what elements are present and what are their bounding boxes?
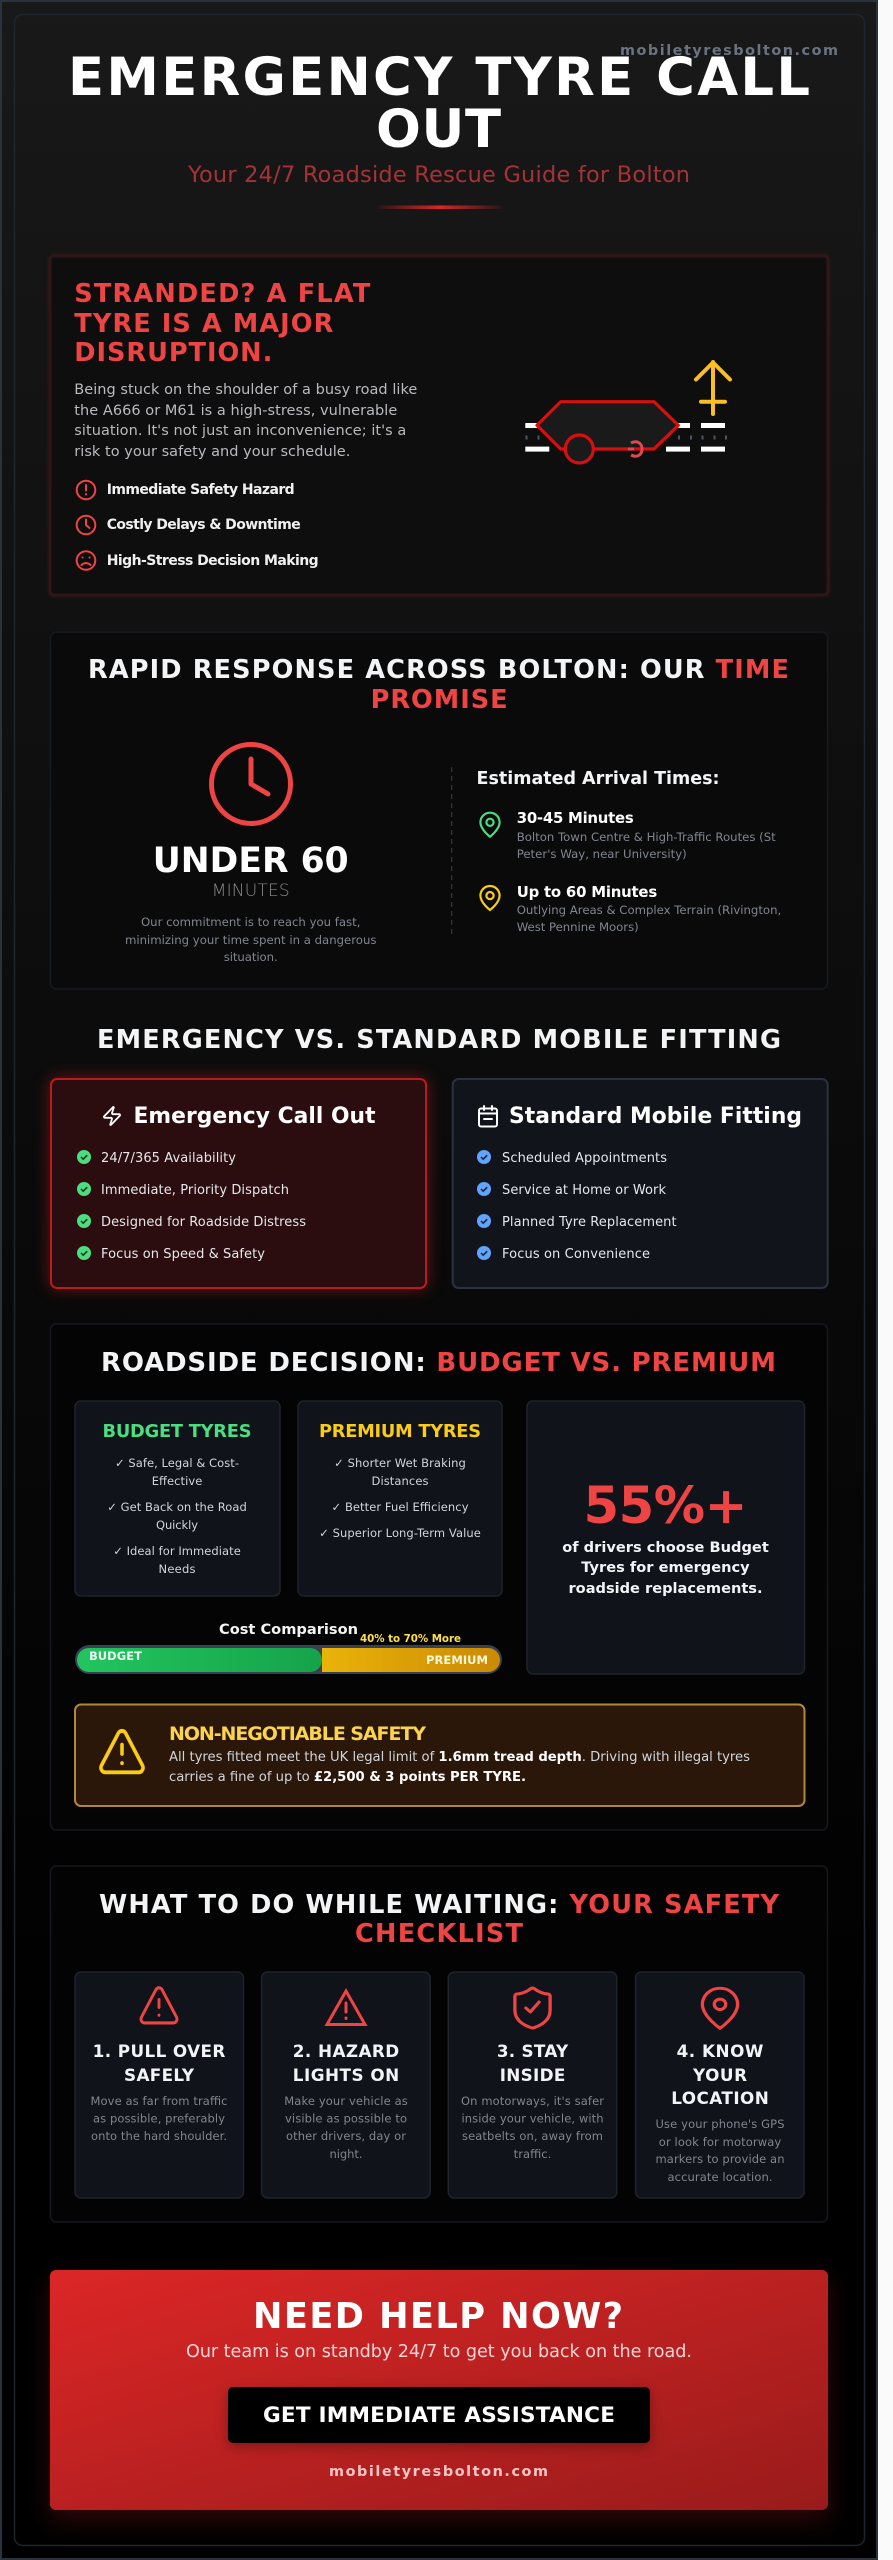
hero body text: the A666 or M61 is a high-stress, vulnerable <box>74 403 397 419</box>
hero heading: DISRUPTION. <box>74 338 272 368</box>
hero heading: STRANDED? A FLAT <box>74 279 371 309</box>
step 4: know your location: markers to provide an <box>656 2152 784 2166</box>
section heading: emergency vs standard: EMERGENCY VS. STANDARD MOBILE FITTING <box>97 1025 781 1055</box>
standard features list: Scheduled Appointments <box>502 1151 667 1166</box>
emergency features list: Focus on Speed & Safety <box>101 1247 265 1262</box>
chart: cost comparison bar: Cost Comparison <box>219 1621 358 1638</box>
step 3: stay inside: 3. STAY <box>497 2041 569 2061</box>
card title: Standard Mobile Fitting <box>509 1104 802 1129</box>
standard features list: Planned Tyre Replacement <box>502 1215 677 1230</box>
card: budget tyres: BUDGET TYRES <box>102 1421 252 1442</box>
standard features list: Focus on Convenience <box>502 1247 650 1262</box>
panel: budget vs premium <box>50 1324 828 1830</box>
step 1: pull over safely: as possible, preferably <box>93 2112 225 2126</box>
arrival item: town centre <box>480 809 776 861</box>
step 2: hazard lights on: 2. HAZARD <box>293 2041 399 2061</box>
card: budget tyres: ✓ Ideal for Immediate <box>113 1544 241 1558</box>
step 4: know your location: accurate location. <box>668 2170 772 2184</box>
delays list item: Costly Delays & Downtime <box>107 517 301 533</box>
cta text: Our team is on standby 24/7 to get you back on the road. <box>186 2342 692 2362</box>
emergency features list: 24/7/365 Availability <box>101 1151 236 1166</box>
step 3: stay inside: On motorways, it's safer <box>461 2094 604 2108</box>
step 2: hazard lights on: visible as possible to <box>285 2112 407 2126</box>
callout: non-negotiable safety: NON-NEGOTIABLE SAFETY <box>169 1723 426 1745</box>
watermark url: mobiletyresbolton.com <box>620 43 838 59</box>
stat: 55 percent: 55%+ <box>584 1476 748 1536</box>
chart: cost comparison bar: BUDGET <box>89 1649 142 1663</box>
hero body text: risk to your safety and your schedule. <box>74 444 350 460</box>
card: premium tyres: PREMIUM TYRES <box>319 1421 481 1442</box>
stat: 55 percent <box>527 1401 804 1674</box>
under 60 minutes stat: MINUTES <box>212 881 290 901</box>
step 4: know your location: 4. KNOW <box>677 2041 763 2061</box>
step 1: pull over safely: SAFELY <box>124 2065 195 2085</box>
arrival item: outlying areas: Outlying Areas & Complex Terrain (Rivington, <box>517 903 781 917</box>
icon: broken down car on road <box>525 362 730 463</box>
hero heading <box>74 279 371 368</box>
arrival item: outlying areas: Up to 60 Minutes <box>517 883 657 901</box>
title: OUT <box>376 99 501 160</box>
chart: cost comparison bar: 40% to 70% More <box>360 1633 461 1645</box>
step 4: know your location: YOUR <box>692 2065 747 2085</box>
panel: safety checklist <box>50 1866 828 2222</box>
hazard list item: Immediate Safety Hazard <box>107 482 295 498</box>
arrival times heading: Estimated Arrival Times: <box>476 769 720 789</box>
card: budget tyres: ✓ Get Back on the Road <box>107 1500 247 1514</box>
panel: emergency call out <box>51 1079 426 1288</box>
under 60 minutes stat: UNDER 60 <box>153 841 349 881</box>
title rule <box>373 206 507 209</box>
callout: non-negotiable safety: All tyres fitted meet the UK legal limit of 1.6mm tread depth. Driving with illegal tyres <box>169 1750 750 1765</box>
card: premium tyres <box>298 1401 502 1596</box>
card: premium tyres: ✓ Shorter Wet Braking <box>334 1456 466 1470</box>
commitment text: minimizing your time spent in a dangerous <box>125 933 376 947</box>
icon: warning triangle <box>101 1731 143 1772</box>
panel: time promise <box>50 632 828 989</box>
cta button: GET IMMEDIATE ASSISTANCE <box>263 2403 615 2428</box>
arrival item: town centre: 30-45 Minutes <box>517 809 634 827</box>
step 3: stay inside: seatbelts on, away from <box>462 2129 603 2143</box>
step 2: hazard lights on: Make your vehicle as <box>284 2094 408 2108</box>
standard features list: Service at Home or Work <box>502 1183 666 1198</box>
step 4: know your location <box>636 1972 804 2198</box>
card: budget tyres: Needs <box>158 1562 196 1576</box>
step 3: stay inside: inside your vehicle, with <box>462 2112 604 2126</box>
stat: 55 percent: roadside replacements. <box>568 1580 762 1597</box>
step 3: stay inside <box>448 1972 617 2198</box>
under 60 minutes stat <box>153 841 349 901</box>
commitment text <box>125 915 376 964</box>
stat: 55 percent: Tyres for emergency <box>581 1559 750 1576</box>
cta heading: NEED HELP NOW? <box>253 2296 623 2337</box>
title <box>68 47 810 160</box>
card: premium tyres: ✓ Superior Long-Term Value <box>319 1526 481 1540</box>
card: premium tyres: ✓ Better Fuel Efficiency <box>332 1500 469 1514</box>
emergency features list: Designed for Roadside Distress <box>101 1215 306 1230</box>
title: EMERGENCY TYRE CALL <box>68 47 810 108</box>
cta button <box>228 2387 650 2443</box>
hero heading: TYRE IS A MAJOR <box>74 309 334 339</box>
callout: non-negotiable safety: carries a fine of up to £2,500 & 3 points PER TYRE. <box>169 1770 526 1785</box>
section heading <box>99 1890 779 1949</box>
step 3: stay inside: traffic. <box>514 2147 551 2161</box>
stat: 55 percent: of drivers choose Budget <box>562 1539 769 1556</box>
subtitle: Your 24/7 Roadside Rescue Guide for Bolton <box>187 162 690 188</box>
step 1: pull over safely: onto the hard shoulder. <box>91 2129 227 2143</box>
card title: Emergency Call Out <box>134 1104 376 1129</box>
arrival item: outlying areas <box>480 883 781 934</box>
header <box>68 43 838 209</box>
arrival item: town centre: Bolton Town Centre & High-Traffic Routes (St <box>517 830 776 844</box>
card: budget tyres <box>75 1401 280 1596</box>
section heading: RAPID RESPONSE ACROSS BOLTON: OUR TIME <box>88 655 789 685</box>
chart: cost comparison bar <box>75 1621 502 1674</box>
emergency features list: Immediate, Priority Dispatch <box>101 1183 289 1198</box>
step 2: hazard lights on: LIGHTS ON <box>293 2065 399 2085</box>
step 2: hazard lights on <box>262 1972 430 2198</box>
step 4: know your location: Use your phone's GPS <box>656 2117 784 2131</box>
hero body text <box>74 382 417 460</box>
standard features list <box>477 1150 677 1262</box>
step 1: pull over safely <box>75 1972 244 2198</box>
arrival item: outlying areas: West Pennine Moors) <box>517 920 639 934</box>
stress list item: High-Stress Decision Making <box>107 553 319 569</box>
step 3: stay inside: INSIDE <box>500 2065 565 2085</box>
step 4: know your location: or look for motorway <box>659 2135 781 2149</box>
step 4: know your location: LOCATION <box>671 2088 769 2108</box>
step 1: pull over safely: 1. PULL OVER <box>93 2041 225 2061</box>
card: budget tyres: ✓ Safe, Legal & Cost- <box>115 1456 239 1470</box>
section heading: ROADSIDE DECISION: BUDGET VS. PREMIUM <box>101 1348 776 1378</box>
icon: clock <box>212 744 290 824</box>
callout: non-negotiable safety <box>75 1704 804 1806</box>
step 2: hazard lights on: night. <box>330 2147 362 2161</box>
section heading: PROMISE <box>371 685 508 715</box>
card: premium tyres: Distances <box>372 1474 428 1488</box>
commitment text: Our commitment is to reach you fast, <box>141 915 360 929</box>
cta url: mobiletyresbolton.com <box>329 2464 548 2480</box>
section heading: WHAT TO DO WHILE WAITING: YOUR SAFETY <box>99 1890 779 1920</box>
section heading: CHECKLIST <box>355 1919 524 1949</box>
section heading <box>88 655 789 715</box>
hero body text: Being stuck on the shoulder of a busy road like <box>74 382 417 398</box>
hero body text: situation. It's not just an inconvenience; it's a <box>74 423 406 439</box>
panel: stranded hero <box>50 256 828 595</box>
arrival item: town centre: Peter's Way, near University) <box>517 847 687 861</box>
step 2: hazard lights on: other drivers, day or <box>286 2129 406 2143</box>
card: budget tyres: Quickly <box>156 1518 198 1532</box>
emergency features list <box>77 1150 306 1262</box>
step 1: pull over safely: Move as far from traffic <box>90 2094 228 2108</box>
panel: call to action <box>50 2270 828 2510</box>
commitment text: situation. <box>224 950 278 964</box>
chart: cost comparison bar: PREMIUM <box>426 1653 488 1667</box>
panel: standard mobile fitting <box>453 1079 828 1288</box>
card: budget tyres: Effective <box>152 1474 202 1488</box>
